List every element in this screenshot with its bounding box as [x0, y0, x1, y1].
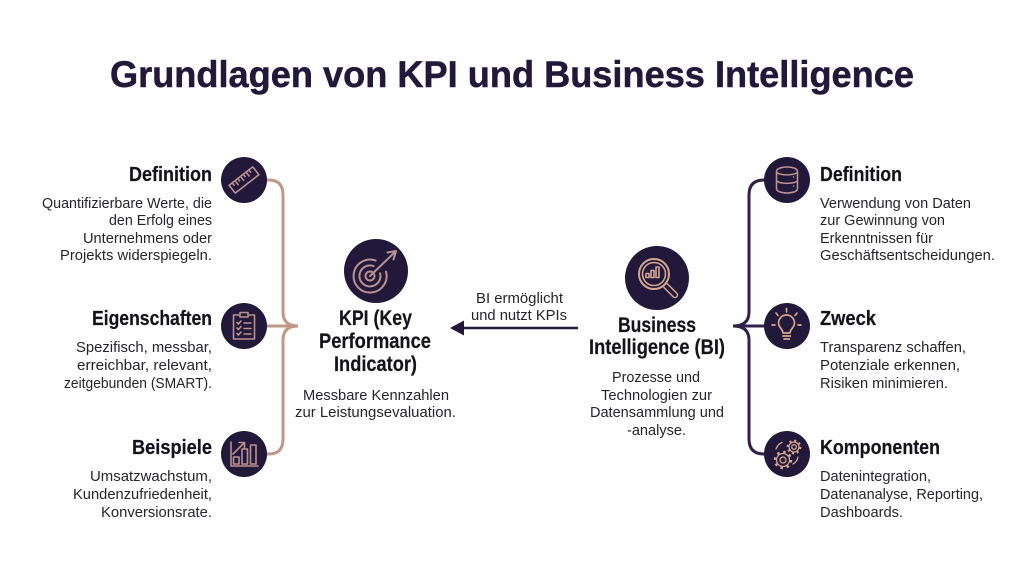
icon: checklist: [221, 303, 267, 349]
heading: Beispiele: [132, 437, 212, 459]
text block: Erkenntnissen für: [820, 230, 933, 247]
text block: Quantifizierbare Werte, die: [42, 195, 212, 212]
text block: zur Gewinnung von: [820, 212, 945, 229]
text block: [820, 195, 995, 264]
text block: [590, 369, 724, 439]
text block: [73, 468, 212, 521]
panel: KPI definition: [42, 164, 212, 264]
title: Grundlagen von KPI und Business Intelligence: [110, 54, 914, 95]
text block: Datensammlung und: [590, 404, 724, 421]
text block: [42, 195, 212, 264]
heading: [589, 314, 725, 359]
text block: [295, 387, 456, 421]
icon: growth chart: [221, 431, 267, 477]
heading: Definition: [129, 164, 212, 186]
text block: Verwendung von Daten: [820, 195, 971, 212]
panel: KPI centre: [295, 239, 456, 421]
heading: Eigenschaften: [92, 308, 212, 330]
text block: Konversionsrate.: [101, 504, 212, 521]
text block: Risiken minimieren.: [820, 375, 948, 392]
heading: Performance: [319, 330, 431, 353]
icon: ruler: [221, 157, 267, 203]
text block: Projekts widerspiegeln.: [60, 247, 212, 264]
heading: Intelligence (BI): [589, 336, 725, 359]
text block: Technologien zur: [601, 387, 712, 404]
text block: [820, 339, 966, 392]
text block: -analyse.: [627, 422, 686, 439]
text block: Prozesse und: [612, 369, 700, 386]
text block: erreichbar, relevant,: [77, 357, 212, 374]
text block: Datenanalyse, Reporting,: [820, 486, 983, 503]
arrow label: und nutzt KPIs: [471, 307, 567, 324]
panel: KPI examples: [73, 437, 212, 521]
text block: [64, 339, 212, 392]
panel: BI definition: [820, 164, 995, 264]
text block: Umsatzwachstum,: [90, 468, 212, 485]
icon: target with arrow: [344, 239, 408, 303]
icon: gears: [764, 431, 810, 477]
icon: database: [764, 157, 810, 203]
heading: Indicator): [334, 353, 417, 376]
text block: [820, 468, 983, 521]
heading: Zweck: [820, 308, 877, 330]
arrow: BI to KPI: [450, 320, 578, 336]
text block: zur Leistungsevaluation.: [295, 404, 456, 421]
text block: zeitgebunden (SMART).: [64, 375, 212, 392]
heading: Komponenten: [820, 437, 940, 459]
heading: Business: [618, 314, 696, 337]
panel: BI centre: [589, 246, 725, 439]
icon: light bulb: [764, 303, 810, 349]
bracket: KPI connector: [267, 180, 298, 454]
text block: Spezifisch, messbar,: [76, 339, 212, 356]
heading: KPI (Key: [339, 307, 412, 330]
text block: den Erfolg eines: [109, 212, 212, 229]
text block: Datenintegration,: [820, 468, 931, 485]
text block: Potenziale erkennen,: [820, 357, 960, 374]
text block: Dashboards.: [820, 504, 903, 521]
bracket: BI connector: [733, 180, 767, 454]
arrow label: [471, 290, 567, 324]
text block: Unternehmens oder: [83, 230, 212, 247]
panel: BI components: [820, 437, 983, 521]
text block: Messbare Kennzahlen: [303, 387, 449, 404]
text block: Kundenzufriedenheit,: [73, 486, 212, 503]
text block: Geschäftsentscheidungen.: [820, 247, 995, 264]
panel: KPI properties: [64, 308, 212, 392]
heading: Definition: [820, 164, 902, 186]
arrow label: BI ermöglicht: [476, 290, 564, 307]
panel: BI purpose: [820, 308, 966, 392]
heading: [319, 307, 431, 376]
icon: magnifier with chart: [625, 246, 689, 310]
text block: Transparenz schaffen,: [820, 339, 966, 356]
